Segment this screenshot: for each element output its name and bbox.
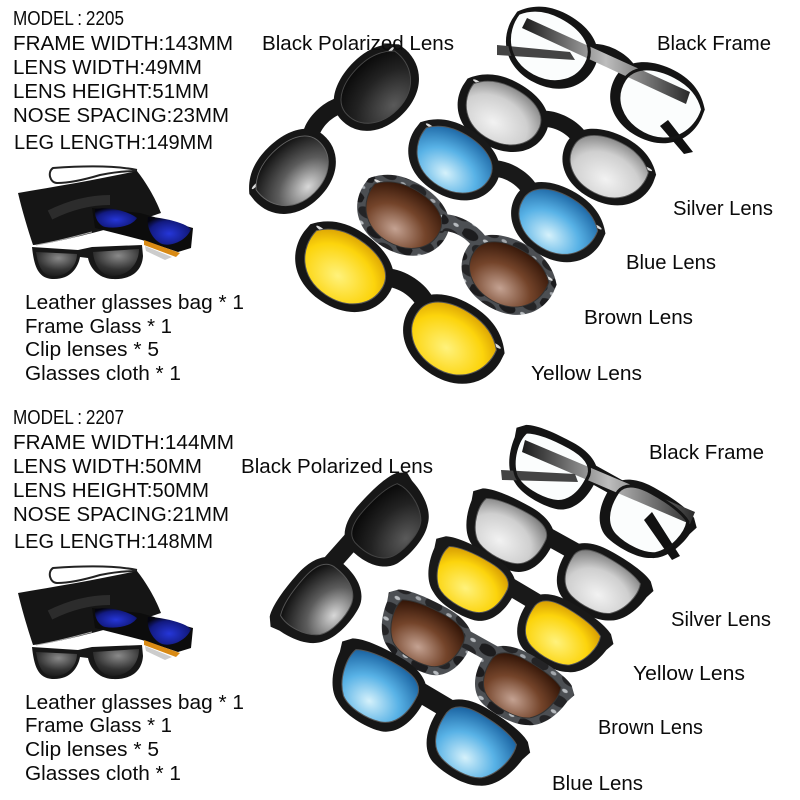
round sunglasses: brown lens (342, 161, 567, 331)
package contents 2205: Leather glasses bag * 1 (25, 292, 244, 314)
round sunglasses: yellow lens (277, 205, 518, 402)
package contents 2205: Clip lenses * 5 (25, 339, 159, 361)
square sunglasses: silver lens (447, 479, 660, 638)
lens labels 2205: Yellow Lens (531, 363, 642, 385)
lens labels 2207: Blue Lens (552, 773, 643, 795)
specifications: model 2207 (13, 407, 234, 553)
specifications: model 2207: LENS HEIGHT:50MM (13, 480, 209, 502)
specifications: model 2207: FRAME WIDTH:144MM (13, 432, 234, 454)
icon: leather bag kit 2207 (18, 566, 193, 679)
specifications: model 2205: LENS WIDTH:49MM (13, 57, 202, 79)
lens labels 2207: Yellow Lens (633, 663, 745, 685)
package contents 2205: Frame Glass * 1 (25, 316, 172, 338)
package contents 2207: Glasses cloth * 1 (25, 763, 181, 785)
package contents 2207: Clip lenses * 5 (25, 739, 159, 761)
icon: leather bag kit 2205 (18, 166, 193, 279)
package contents 2207 (25, 692, 244, 785)
square sunglasses: black polarized lens (260, 463, 449, 664)
package contents 2205 (25, 292, 244, 385)
specifications: model 2205: MODEL : 2205 (13, 8, 124, 30)
lens labels 2207 (241, 442, 771, 795)
specifications: model 2205: LENS HEIGHT:51MM (13, 81, 209, 103)
package contents 2207: Leather glasses bag * 1 (25, 692, 244, 714)
specifications: model 2207: LENS WIDTH:50MM (13, 456, 202, 478)
package contents 2205: Glasses cloth * 1 (25, 363, 181, 385)
specifications: model 2205: NOSE SPACING:23MM (13, 105, 229, 127)
specifications: model 2205: FRAME WIDTH:143MM (13, 33, 233, 55)
lens labels 2207: Black Frame (649, 442, 764, 464)
lens labels 2205: Silver Lens (673, 198, 773, 220)
lens labels 2205: Black Frame (657, 33, 771, 55)
square sunglasses: blue lens (311, 628, 538, 800)
round sunglasses: silver lens (444, 61, 666, 220)
specifications: model 2205: LEG LENGTH:149MM (14, 132, 213, 154)
square glasses: black frame (490, 415, 704, 575)
lens labels 2207: Brown Lens (598, 717, 703, 739)
square sunglasses: yellow lens (409, 527, 621, 690)
lens labels 2205: Black Polarized Lens (262, 33, 454, 55)
package contents 2207: Frame Glass * 1 (25, 715, 172, 737)
lens labels 2205 (262, 33, 773, 385)
lens labels 2205: Blue Lens (626, 252, 716, 274)
specifications: model 2207: MODEL : 2207 (13, 407, 124, 429)
specifications: model 2205 (13, 8, 233, 154)
round glasses: black frame (491, 0, 715, 159)
round sunglasses: blue lens (393, 105, 616, 278)
specifications: model 2207: NOSE SPACING:21MM (13, 504, 229, 526)
square sunglasses: brown lens (362, 580, 581, 743)
specifications: model 2207: LEG LENGTH:148MM (14, 531, 213, 553)
round sunglasses: black polarized lens (235, 30, 436, 231)
lens labels 2207: Silver Lens (671, 609, 771, 631)
lens labels 2207: Black Polarized Lens (241, 456, 433, 478)
lens labels 2205: Brown Lens (584, 307, 693, 329)
